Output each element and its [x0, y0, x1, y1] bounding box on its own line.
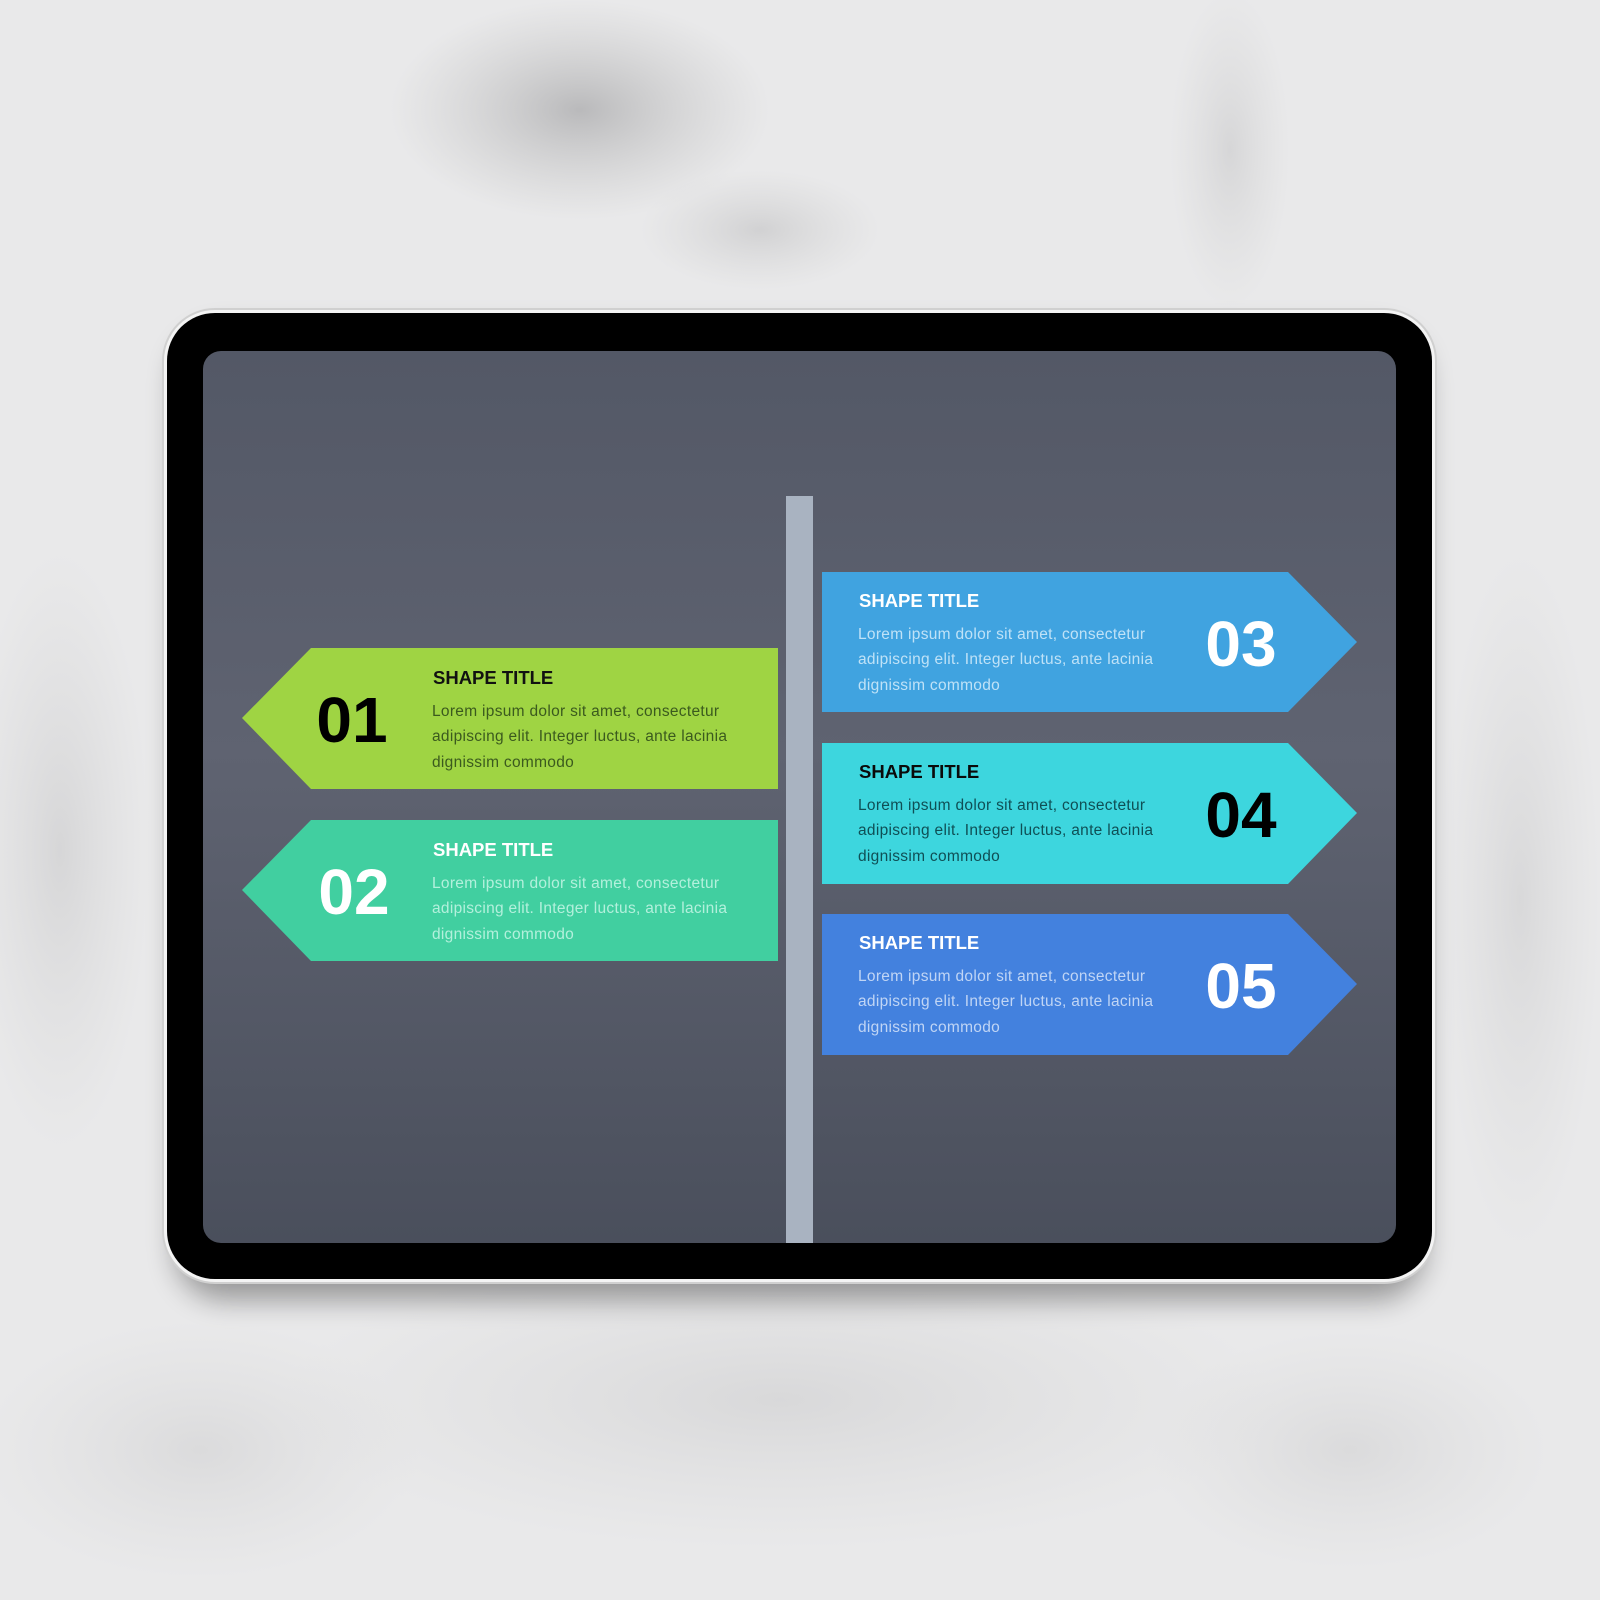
title 03: SHAPE TITLE	[859, 590, 979, 611]
text 04: dignissim commodo	[858, 848, 1000, 865]
number 02: 02	[318, 856, 390, 928]
title 05: SHAPE TITLE	[859, 932, 979, 953]
text 05: dignissim commodo	[858, 1019, 1000, 1036]
text 01: adipiscing elit. Integer luctus, ante lacinia	[432, 728, 727, 745]
number 03: 03	[1205, 608, 1277, 680]
title 02: SHAPE TITLE	[433, 839, 553, 860]
text 03: dignissim commodo	[858, 677, 1000, 694]
tablet device	[163, 309, 1436, 1283]
arrow 03	[822, 572, 1357, 712]
arrow 04	[822, 743, 1357, 884]
device shadow	[175, 330, 1425, 1300]
text 05: Lorem ipsum dolor sit amet, consectetur	[858, 968, 1145, 985]
number 04: 04	[1205, 779, 1277, 851]
text 02: dignissim commodo	[432, 926, 574, 943]
text 04: Lorem ipsum dolor sit amet, consectetur	[858, 797, 1145, 814]
text 02: Lorem ipsum dolor sit amet, consectetur	[432, 875, 719, 892]
arrow 05	[822, 914, 1357, 1055]
text 04: adipiscing elit. Integer luctus, ante lacinia	[858, 822, 1153, 839]
text 01: dignissim commodo	[432, 754, 574, 771]
text 03: adipiscing elit. Integer luctus, ante lacinia	[858, 651, 1153, 668]
screen	[203, 351, 1396, 1243]
text 02: adipiscing elit. Integer luctus, ante lacinia	[432, 900, 727, 917]
arrow 01	[242, 648, 778, 789]
text 05: adipiscing elit. Integer luctus, ante lacinia	[858, 993, 1153, 1010]
title 04: SHAPE TITLE	[859, 761, 979, 782]
arrow 02	[242, 820, 778, 961]
number 05: 05	[1205, 950, 1277, 1022]
text 03: Lorem ipsum dolor sit amet, consectetur	[858, 626, 1145, 643]
pole	[786, 496, 813, 1243]
number 01: 01	[316, 684, 388, 756]
text 01: Lorem ipsum dolor sit amet, consectetur	[432, 703, 719, 720]
title 01: SHAPE TITLE	[433, 667, 553, 688]
